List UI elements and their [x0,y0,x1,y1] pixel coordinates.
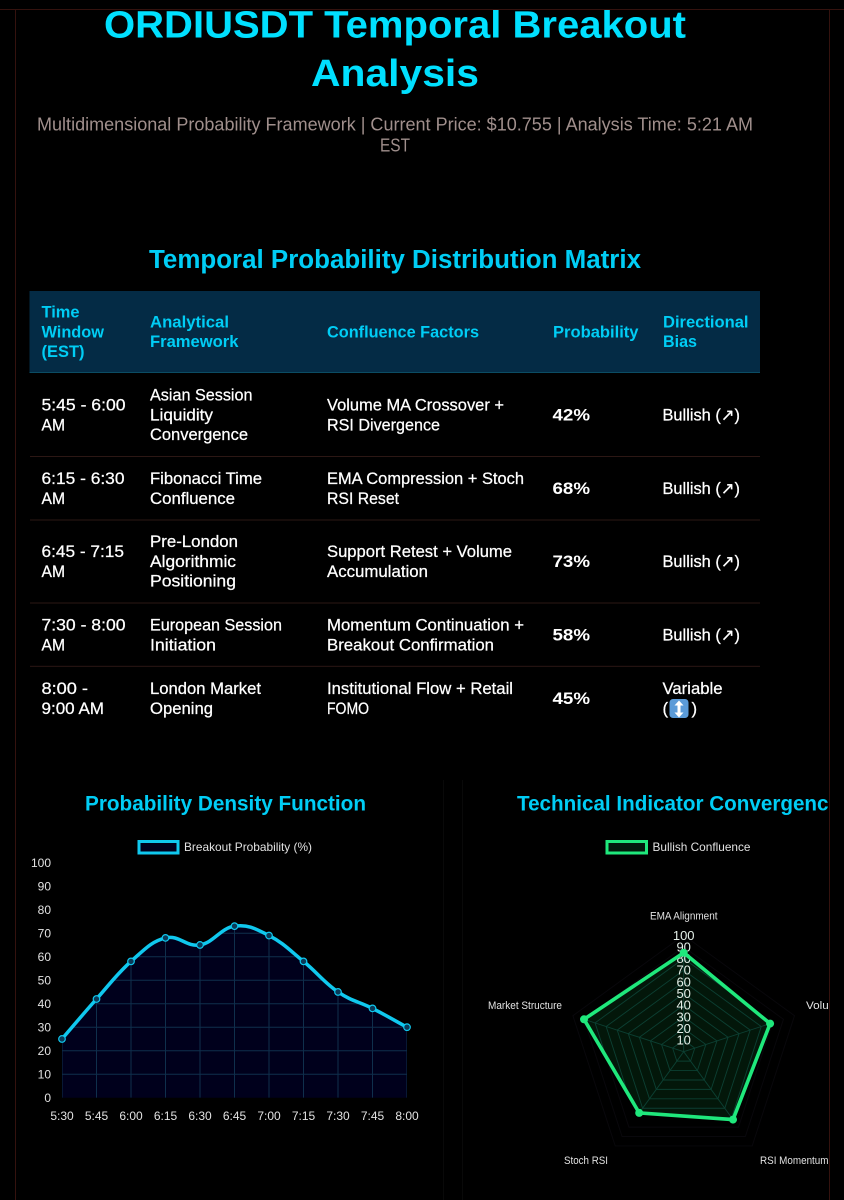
radar axis labels: Market Structure [488,1000,562,1012]
row 3: Bullish (↗) [662,552,740,571]
radar scale labels: 30 [676,1009,691,1024]
y axis labels: 100 [31,856,51,870]
y axis labels: 30 [38,1020,51,1034]
row 3: AM [42,562,65,581]
probability curve [62,926,407,1039]
row 1: Bullish (↗) [662,406,740,424]
table header [30,291,760,373]
row 2: 6:15 - 6:30 [42,469,124,488]
chart heading: Technical Indicator Convergence [517,793,840,816]
chart legend: Bullish Confluence [652,840,751,854]
radar scale labels: 20 [676,1021,691,1036]
subtitle: EST [380,134,410,156]
radar data points [580,949,774,1124]
table header: Confluence Factors [327,322,479,341]
row 3: Positioning [150,572,236,590]
y axis labels: 40 [38,997,51,1011]
chart heading: Probability Density Function [85,793,366,816]
table: temporal probability matrix [30,291,760,718]
chart panel: probability density function [31,793,419,1123]
row 1: 5:45 - 6:00 [42,396,126,415]
row 2: RSI Reset [327,489,399,508]
row 5 [42,679,722,718]
x axis labels: 6:15 [154,1109,178,1123]
data points [59,923,410,1042]
row 2: Bullish (↗) [662,479,740,498]
x axis labels: 7:15 [292,1109,316,1123]
row 5: ( [662,699,668,718]
chart legend: Breakout Probability (%) [184,840,312,854]
title [104,4,686,95]
row 1: Liquidity [150,405,214,424]
row 5: ) [692,699,697,718]
subtitle [37,114,753,156]
radar outer grid [573,935,795,1146]
row 4: Momentum Continuation + [327,616,524,634]
radar scale labels: 80 [676,951,691,966]
row 2: AM [42,489,65,508]
y axis labels: 20 [38,1044,51,1058]
row 1: Convergence [150,425,248,444]
title: ORDIUSDT Temporal Breakout [104,4,686,46]
row 4: Breakout Confirmation [327,636,494,654]
radar axis labels: RSI Momentum [760,1155,829,1167]
row 5: Opening [150,699,213,718]
table header: Directional [663,312,748,332]
row 2: Confluence [150,489,235,508]
row 3: Support Retest + Volume [327,542,512,561]
row 1 [30,386,760,457]
x axis labels: 6:00 [119,1109,143,1123]
x axis labels: 5:30 [50,1109,74,1123]
table header: Window [42,322,105,341]
radar scale labels: 50 [676,986,691,1001]
row 4 [30,616,760,667]
table header: Framework [150,332,239,351]
chart panel: technical indicator convergence [488,793,844,1167]
x axis labels: 8:00 [395,1109,419,1123]
y axis labels: 90 [38,880,51,894]
y axis labels: 0 [44,1091,51,1105]
radar inner grid [588,956,766,1118]
row 3: 73% [552,552,590,571]
row 4: AM [42,636,65,654]
row 5: 8:00 - [42,679,88,698]
row 1: RSI Divergence [327,415,440,434]
row 4: 58% [552,626,590,644]
x axis labels: 6:30 [188,1109,212,1123]
x axis labels [50,1109,419,1123]
radar data outline [584,953,770,1120]
row 3: 6:45 - 7:15 [42,542,124,561]
row 5: 9:00 AM [42,699,104,718]
icon: up-down arrow emoji [670,699,688,718]
heading: matrix: Temporal Probability Distribution Matrix [149,246,641,274]
table header: Probability [553,322,639,341]
row 4: European Session [150,616,282,634]
radar scale labels: 100 [673,928,695,943]
x axis labels: 6:45 [223,1109,247,1123]
radar data fill [584,953,770,1120]
radar scale labels: 90 [676,939,691,954]
radar scale labels [674,931,694,1044]
radar scale labels: 60 [676,974,691,989]
table header: Time [42,302,80,322]
title: Analysis [311,53,479,95]
table header: Bias [663,332,697,351]
area under curve [62,926,407,1098]
y axis labels: 80 [38,903,51,917]
y axis labels: 60 [38,950,51,964]
radar axis labels [488,910,844,1167]
row 5: Institutional Flow + Retail [327,679,513,698]
radar axis labels: Stoch RSI [564,1155,608,1167]
row 1: Volume MA Crossover + [327,396,504,415]
x axis labels: 7:30 [326,1109,350,1123]
row 5: Variable [662,679,722,698]
row 2: EMA Compression + Stoch [327,469,524,488]
row 3: Pre-London [150,532,238,551]
y axis labels: 70 [38,926,51,940]
y axis labels: 10 [38,1068,51,1082]
radar scale labels: 10 [676,1032,691,1048]
row 3: Accumulation [327,562,428,581]
row 2: Fibonacci Time [150,469,262,488]
row 1: Asian Session [150,386,252,405]
table header: (EST) [42,342,84,361]
row 4: 7:30 - 8:00 [42,616,126,634]
row 3: Algorithmic [150,552,236,571]
subtitle: Multidimensional Probability Framework | Current Price: $10.755 | Analysis Time: 5:21 AM [37,114,753,134]
row 4: Bullish (↗) [662,626,740,644]
row 2 [30,469,760,520]
row 2: 68% [552,479,590,498]
x axis labels: 5:45 [85,1109,109,1123]
row 4: Initiation [150,636,216,654]
radar scale labels: 70 [676,963,691,978]
chart legend [607,840,751,854]
x axis labels: 7:00 [257,1109,281,1123]
y axis labels [31,856,51,1105]
row 1: 42% [552,406,590,424]
x axis labels: 7:45 [361,1109,385,1123]
radar axis labels: EMA Alignment [650,910,718,922]
radar scale labels: 40 [676,998,691,1013]
row 5: London Market [150,679,261,698]
y axis labels: 50 [38,974,51,988]
row 5: 45% [552,689,590,708]
table header: Analytical [150,312,229,332]
row 3 [30,532,760,604]
row 1: AM [42,415,65,434]
row 5: FOMO [327,699,369,718]
radar axis labels: Volume [806,1000,844,1012]
